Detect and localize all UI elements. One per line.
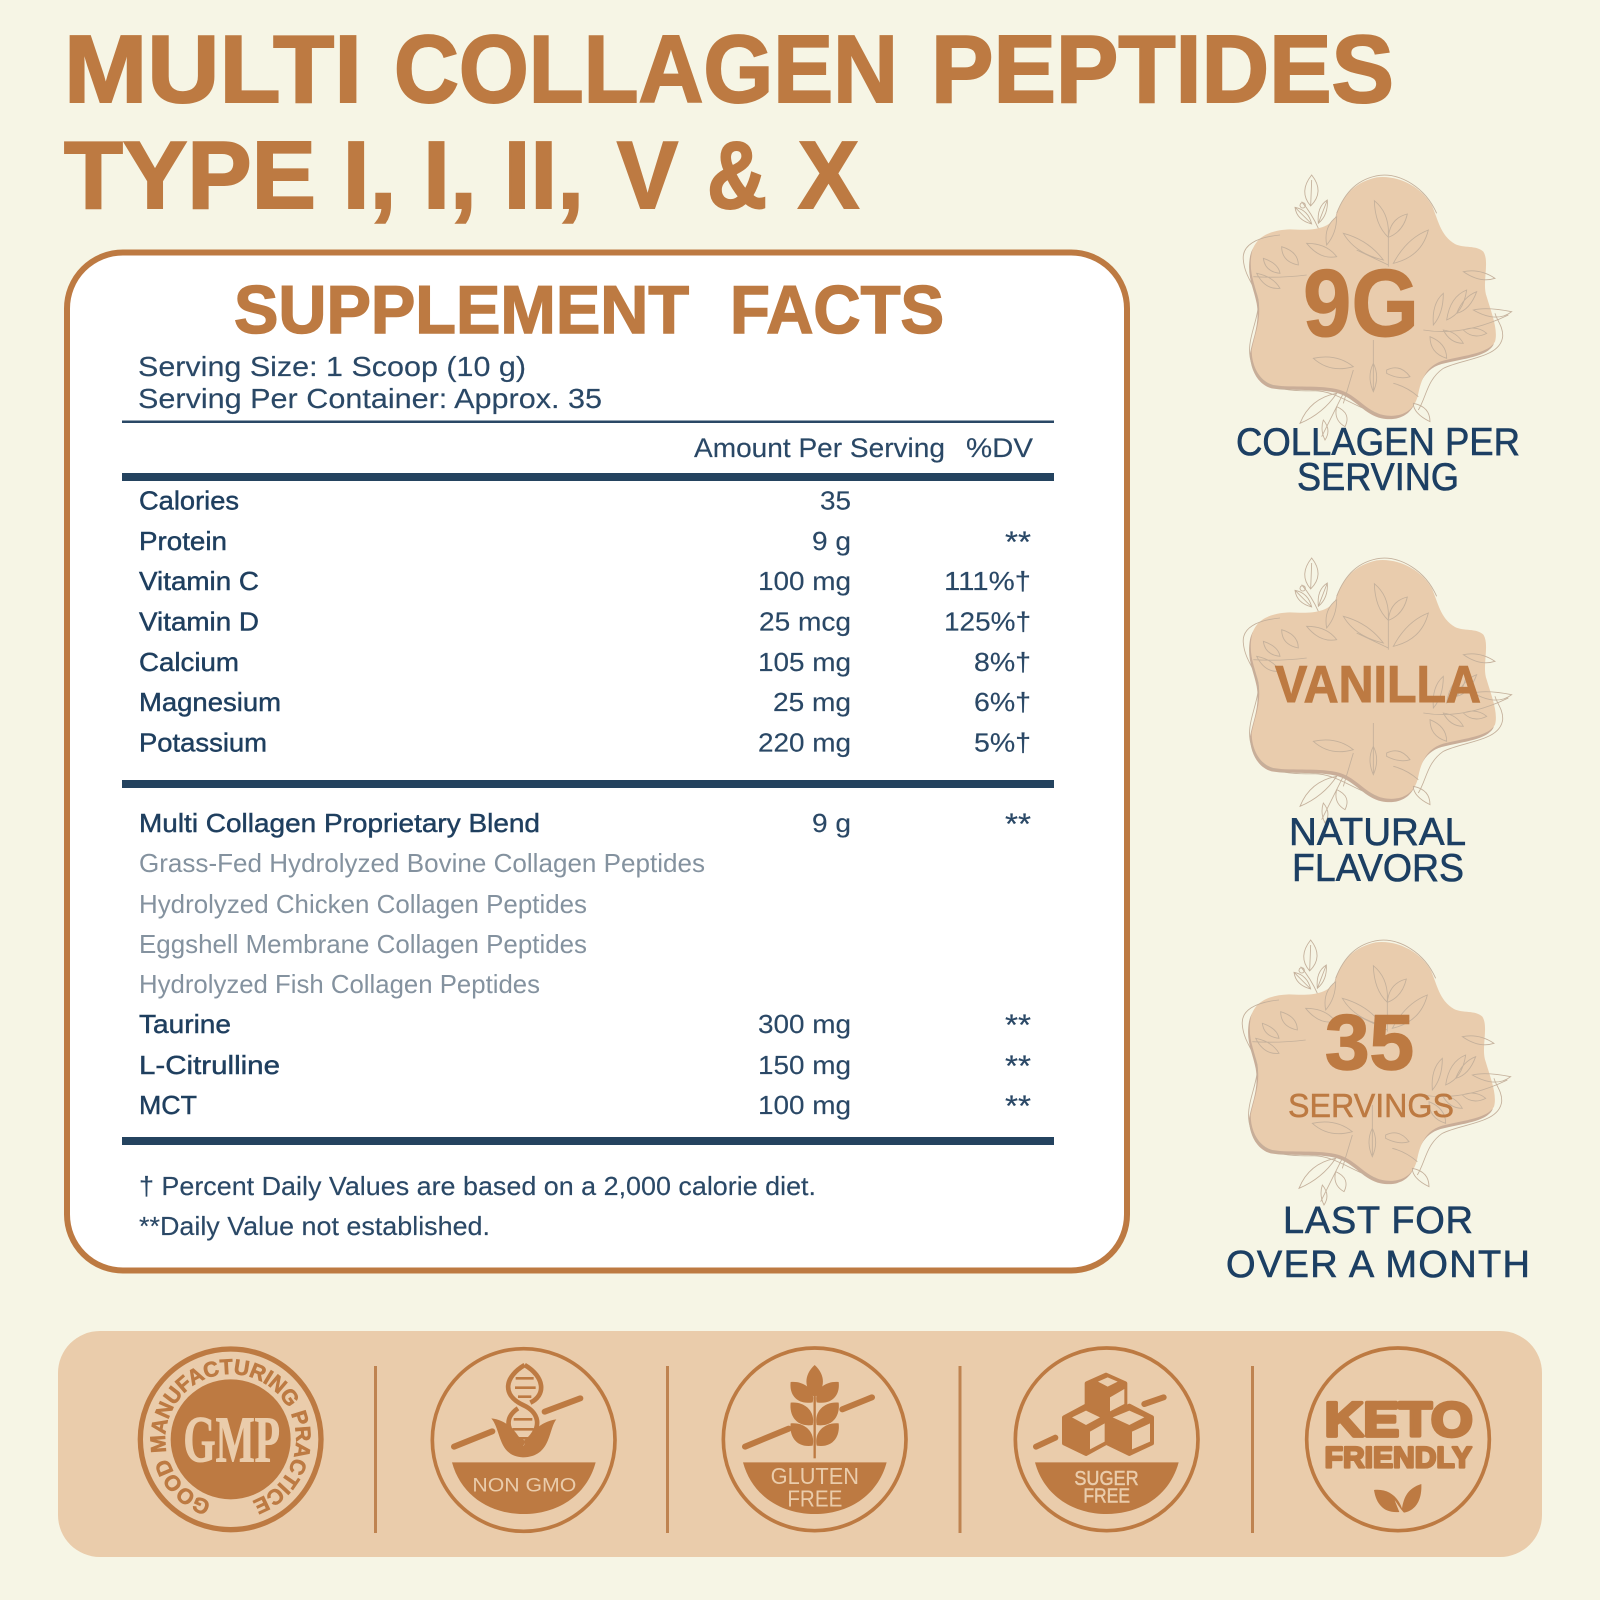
badge: keto friendly: KETO (1325, 1393, 1473, 1447)
title: V (617, 122, 678, 229)
title: & (707, 122, 767, 229)
heading: supplement facts (234, 272, 944, 348)
footnotes: † Percent Daily Values are based on a 2,000 calorie diet. (139, 1171, 816, 1201)
row: multi collagen blend: ** (1005, 808, 1031, 841)
row: potassium: 220 mg (758, 728, 851, 758)
icon: slash (1036, 1397, 1164, 1447)
icon: slash (454, 1398, 580, 1447)
serving info: Serving Size: 1 Scoop (10 g) (138, 351, 526, 382)
column headers: Amount Per Serving (694, 433, 945, 463)
callout: vanilla (1243, 558, 1512, 890)
title: X (798, 122, 859, 229)
icon: leaf blob (1243, 175, 1512, 440)
serving info (138, 351, 602, 414)
title: TYPE I, I, II, (64, 122, 584, 229)
row: calories: Calories (139, 486, 239, 516)
badge: keto friendly (1307, 1348, 1489, 1531)
badge: non gmo (432, 1349, 615, 1531)
badge: sugar free: SUGER (1074, 1467, 1139, 1490)
caption: COLLAGEN PER (1236, 421, 1520, 464)
blend ingredients: Grass-Fed Hydrolyzed Bovine Collagen Peptides (139, 848, 705, 878)
row: protein: ** (1005, 526, 1031, 559)
row: multi collagen blend: 9 g (812, 808, 851, 838)
caption: LAST FOR (1283, 1200, 1473, 1242)
footnotes: **Daily Value not established. (139, 1211, 490, 1241)
row: calcium: Calcium (139, 647, 239, 677)
row: protein (139, 526, 1031, 559)
badge: sugar free (1015, 1348, 1198, 1531)
row: l-citrulline: ** (1005, 1050, 1031, 1083)
row: taurine: 300 mg (758, 1009, 851, 1039)
row: vitamin c: 111%† (944, 566, 1031, 596)
title (64, 16, 1394, 229)
badge: sugar free: FREE (1083, 1485, 1130, 1508)
row: taurine: ** (1005, 1009, 1031, 1042)
footnotes (139, 1171, 816, 1241)
badge: gluten free (723, 1348, 906, 1531)
icon: dna helix (508, 1365, 541, 1443)
title: MULTI (64, 16, 362, 123)
caption: OVER A MONTH (1226, 1244, 1530, 1286)
badge: gluten free: GLUTEN (771, 1463, 859, 1489)
row: multi collagen blend: Multi Collagen Proprietary Blend (139, 808, 540, 838)
row: vitamin c: 100 mg (758, 566, 851, 596)
big value (1288, 998, 1454, 1125)
blend ingredients: Hydrolyzed Fish Collagen Peptides (139, 969, 540, 999)
column headers: %DV (966, 433, 1033, 463)
caption (1226, 1200, 1530, 1286)
callout: 35 servings (1226, 940, 1530, 1286)
badge: gmp: GOOD MANUFACTURING PRACTICE (150, 1358, 311, 1514)
caption: FLAVORS (1292, 847, 1464, 890)
icon: leaves (491, 1418, 556, 1457)
callout: 9g collagen (1236, 175, 1520, 499)
row: l-citrulline: L-Citrulline (139, 1050, 280, 1080)
big value: 9G (1303, 250, 1419, 357)
icon: leaf blob (1242, 940, 1511, 1205)
row: l-citrulline: 150 mg (758, 1050, 851, 1080)
caption (1289, 811, 1466, 890)
row: protein: 9 g (812, 526, 851, 556)
row: magnesium: 6%† (974, 687, 1031, 717)
big value: 35 (1325, 998, 1414, 1086)
row: calcium (139, 647, 1031, 677)
row: l-citrulline (139, 1050, 1031, 1083)
row: vitamin c: Vitamin C (139, 566, 259, 596)
panel: certification band (58, 1331, 1542, 1557)
row: potassium: 5%† (974, 728, 1031, 758)
row: mct (139, 1090, 1031, 1123)
badge: gluten free: FREE (787, 1486, 842, 1512)
badge: non gmo: NON GMO (472, 1476, 576, 1497)
icon: slash (745, 1397, 872, 1447)
row: vitamin c (139, 566, 1031, 596)
row: mct: ** (1005, 1090, 1031, 1123)
heading: supplement facts: FACTS (730, 272, 944, 348)
heading: supplement facts: SUPPLEMENT (234, 272, 689, 348)
row: vitamin d (139, 606, 1031, 636)
title: COLLAGEN (394, 16, 898, 123)
badge: gmp: GMP (183, 1404, 280, 1477)
row: potassium: Potassium (139, 728, 267, 758)
row: magnesium: Magnesium (139, 687, 281, 717)
row: magnesium (139, 687, 1031, 717)
row: mct: MCT (139, 1090, 197, 1120)
badge: keto friendly: FRIENDLY (1325, 1442, 1472, 1475)
row: vitamin d: 125%† (944, 606, 1031, 636)
row: vitamin d: Vitamin D (139, 606, 259, 636)
icon: leaf (1374, 1484, 1421, 1513)
serving info: Serving Per Container: Approx. 35 (138, 383, 602, 414)
row: taurine (139, 1009, 1031, 1042)
row: calories: 35 (820, 486, 851, 516)
row: protein: Protein (139, 526, 227, 556)
big value: SERVINGS (1288, 1088, 1454, 1125)
row: calories (139, 486, 851, 516)
row: magnesium: 25 mg (773, 687, 851, 717)
big value: VANILLA (1275, 656, 1481, 714)
blend ingredients: Hydrolyzed Chicken Collagen Peptides (139, 889, 587, 919)
icon: leaf blob (1243, 558, 1512, 823)
row: multi collagen blend (139, 808, 1031, 841)
row: calcium: 105 mg (758, 647, 851, 677)
row: potassium (139, 728, 1031, 758)
caption (1236, 421, 1520, 499)
caption: SERVING (1297, 456, 1459, 499)
row: mct: 100 mg (758, 1090, 851, 1120)
panel: supplement facts (67, 252, 1127, 1270)
title: PEPTIDES (931, 16, 1394, 123)
row: vitamin d: 25 mcg (759, 606, 851, 636)
blend ingredients: Eggshell Membrane Collagen Peptides (139, 929, 587, 959)
icon: wheat (790, 1365, 839, 1458)
caption: NATURAL (1289, 811, 1466, 854)
row: taurine: Taurine (139, 1009, 231, 1039)
row: calcium: 8%† (974, 647, 1031, 677)
blend ingredients (139, 848, 705, 999)
icon: sugar cubes (1064, 1375, 1152, 1454)
